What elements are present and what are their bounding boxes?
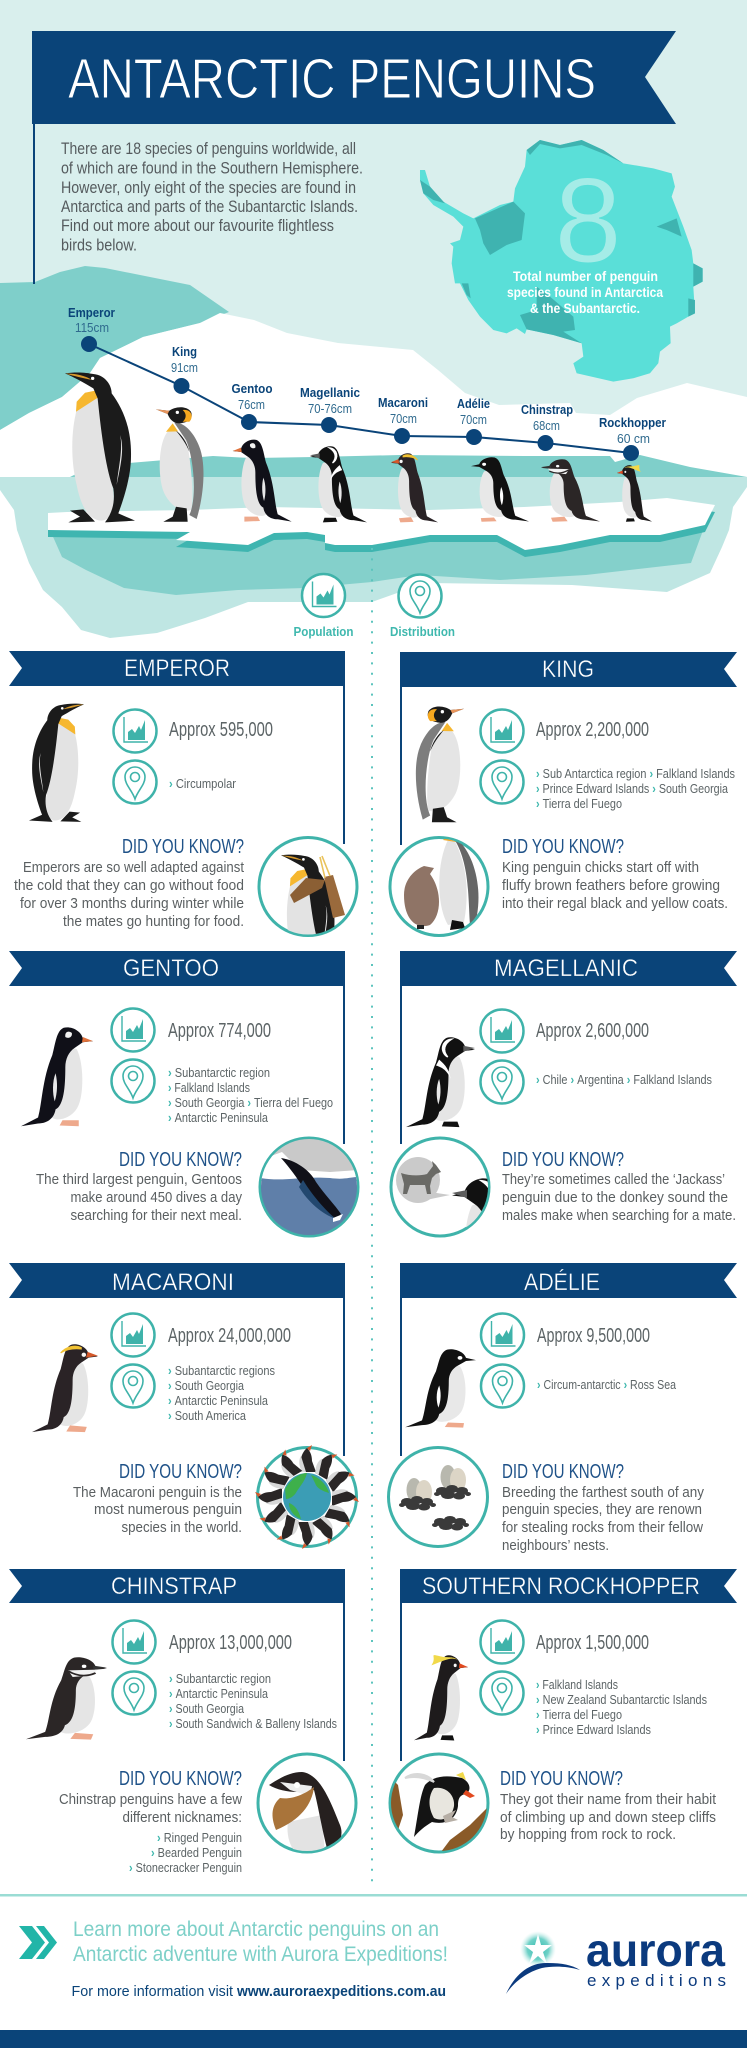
rockhopper banner: SOUTHERN ROCKHOPPER [422,1573,700,1600]
title banner: ANTARCTIC PENGUINS [68,47,596,111]
height labels: 68cm [533,418,560,433]
did you know text: penguin species, they are renown [502,1501,702,1518]
population icon [114,710,156,752]
king banner [400,652,737,845]
height labels: 60 cm [617,431,650,446]
aurora expeditions logo: aurora [586,1924,725,1976]
chinstrap banner: CHINSTRAP [111,1573,237,1600]
sky background [0,0,747,440]
illustration: globe with penguins [255,1445,359,1549]
dark strip under floe [48,505,715,557]
population icon [480,1010,524,1052]
horizon teal band [68,455,747,478]
did you know text: penguin due to the donkey sound the [502,1189,728,1206]
distribution icon [480,760,524,804]
population value: Approx 24,000,000 [168,1325,291,1347]
population value: Approx 595,000 [169,719,273,741]
did you know text: DID YOU KNOW? [122,836,244,858]
distribution list [168,1065,333,1125]
distribution list: › Tierra del Fuego [536,796,622,811]
macaroni banner: MACARONI [112,1269,234,1296]
did you know text: make around 450 dives a day [70,1189,242,1206]
illustration: rockhopper jumping [388,1754,490,1856]
panel: adelie [388,1263,737,1554]
emperor penguin [29,704,84,822]
section divider dotted line [371,548,373,1888]
intro text: Find out more about our favourite flightless [61,217,334,235]
height labels: Macaroni [378,396,428,410]
did you know text: different nicknames: [122,1809,242,1826]
macaroni penguin [32,1344,98,1432]
did you know text: the cold that they can go without food [14,877,244,894]
footer bar [0,2030,747,2048]
did you know text: DID YOU KNOW? [502,836,624,858]
intro text: birds below. [61,236,137,254]
intro text: However, only eight of the species are found in [61,179,356,197]
legend: distribution [390,574,455,639]
distribution list: › New Zealand Subantarctic Islands [536,1692,707,1707]
height chart line [81,336,639,461]
height labels: Chinstrap [521,403,573,417]
intro text: of which are found in the Southern Hemisphere. [61,160,363,178]
did you know text [500,1768,717,1843]
map caption: & the Subantarctic. [530,301,640,316]
magellanic penguin [406,1037,475,1127]
distribution icon [114,760,156,804]
gentoo banner: GENTOO [123,955,219,982]
did you know text: the mates go hunting for food. [63,913,244,930]
population icon [481,1314,524,1356]
height labels: Rockhopper [599,416,666,430]
did you know text: DID YOU KNOW? [502,1149,624,1171]
map caption: species found in Antarctica [507,285,663,300]
population value: Approx 9,500,000 [537,1325,650,1347]
did you know text: › Bearded Penguin [151,1845,242,1860]
white iceberg [0,313,747,495]
footer call to action: Antarctic adventure with Aurora Expeditions! [73,1943,448,1966]
height labels: Magellanic [300,386,360,400]
gentoo penguin [21,1027,93,1126]
rockhopper banner [400,1569,737,1761]
map caption [507,269,663,316]
did you know text: Chinstrap penguins have a few [59,1791,242,1808]
king penguin [416,707,464,822]
did you know text: King penguin chicks start off with [502,859,699,876]
title banner [32,31,676,284]
did you know text: fluffy brown feathers before growing [502,877,720,894]
aurora expeditions logo [506,1924,726,1994]
distribution list: › Antarctic Peninsula [168,1110,269,1125]
illustration: emperor with quiver [258,836,358,937]
did you know text: › Ringed Penguin [157,1830,242,1845]
panel: southern rockhopper [388,1569,737,1856]
did you know text: DID YOU KNOW? [502,1461,624,1483]
distribution list: › Subantarctic region [168,1065,270,1080]
did you know text: neighbours’ nests. [502,1537,609,1554]
ice floe [48,498,715,550]
did you know text [73,1461,242,1536]
did you know text: of climbing up and down steep cliffs [500,1809,716,1826]
distribution icon [481,1364,524,1408]
distribution icon [112,1364,154,1408]
did you know text: The Macaroni penguin is the [73,1484,242,1501]
height labels: Adélie [457,397,490,411]
did you know text: Breeding the farthest south of any [502,1484,704,1501]
did you know text: DID YOU KNOW? [119,1768,242,1790]
magellanic banner [400,951,737,1144]
aurora expeditions logo: expeditions [587,1971,726,1990]
did you know text: The third largest penguin, Gentoos [36,1171,242,1188]
panel: king [390,652,737,936]
did you know text: searching for their next meal. [70,1207,242,1224]
intro text: There are 18 species of penguins worldwide, all [61,140,356,158]
illustration: king and chick [390,834,488,936]
intro text [61,140,363,254]
legend: distribution: Distribution [390,624,455,639]
height labels: 70-76cm [308,401,352,416]
distribution icon [112,1672,156,1714]
king banner: KING [542,656,594,683]
footer website [72,1983,446,2000]
did you know text: DID YOU KNOW? [500,1768,623,1790]
distribution list: › Circumpolar [169,776,237,791]
population value: Approx 774,000 [168,1020,271,1042]
legend: population: Population [294,624,354,639]
did you know text: for over 3 months during winter while [20,895,244,912]
distribution list: › Prince Edward Islands [536,1722,651,1737]
did you know text: DID YOU KNOW? [119,1149,242,1171]
panel: macaroni [9,1263,359,1549]
illustration: eggs and nests [388,1448,488,1546]
did you know text: by hopping from rock to rock. [500,1826,676,1843]
population icon [112,1620,156,1664]
icon: chevrons [19,1926,57,1959]
did you know text: Emperors are so well adapted against [23,859,245,876]
adelie banner: ADÉLIE [524,1269,600,1296]
did you know text: › Stonecracker Penguin [129,1860,242,1875]
illustration: chinstrap head [258,1754,356,1856]
submerged iceberg [50,525,705,595]
magellanic banner: MAGELLANIC [494,955,638,982]
distribution list: › South Georgia [168,1378,245,1393]
distribution list: › Chile › Argentina › Falkland Islands [536,1072,712,1087]
did you know text: species in the world. [122,1519,242,1536]
distribution list: › Prince Edward Islands › South Georgia [536,781,729,796]
did you know text [502,1461,704,1554]
population icon [480,710,524,752]
did you know text [502,836,728,912]
penguin line-up [65,372,652,522]
did you know text: DID YOU KNOW? [119,1461,242,1483]
footer divider [0,1894,747,1896]
did you know text [502,1149,736,1224]
did you know text [36,1149,242,1224]
adelie banner [400,1263,737,1456]
panel: chinstrap [9,1569,356,1875]
height labels: 76cm [238,397,265,412]
population value: Approx 1,500,000 [536,1632,649,1654]
distribution list: › Circum-antarctic › Ross Sea [537,1377,677,1392]
legend: population [294,574,354,639]
distribution list [536,766,735,811]
map caption: Total number of penguin [513,269,658,284]
macaroni banner [9,1263,345,1456]
rockhopper penguin [414,1655,468,1741]
height labels: 115cm [75,320,109,335]
intro text: Antarctica and parts of the Subantarctic Islands. [61,198,358,216]
distribution list [169,1671,337,1731]
did you know text: They got their name from their habit [500,1791,717,1808]
did you know text [59,1768,242,1875]
height labels [68,306,666,446]
population icon [112,1008,154,1052]
distribution list: › Subantarctic regions [168,1363,275,1378]
distribution list: › South Sandwich & Balleny Islands [169,1716,337,1731]
footer website: For more information visit [72,1983,234,2000]
illustration: gentoo diving [260,1137,358,1240]
height labels: 91cm [171,360,198,375]
distribution list: › Antarctic Peninsula [169,1686,269,1701]
gentoo banner [9,951,345,1144]
teal mountain [0,266,229,430]
height labels: Gentoo [232,382,273,396]
distribution list: › Antarctic Peninsula [168,1393,269,1408]
panel: gentoo [9,951,358,1240]
distribution list [168,1363,275,1423]
population icon [480,1620,524,1664]
illustration: donkey and penguin [390,1136,490,1238]
emperor banner [9,651,345,844]
did you know text: most numerous penguin [94,1501,242,1518]
population value: Approx 2,200,000 [536,719,649,741]
distribution list: › South America [168,1408,247,1423]
adelie penguin [405,1349,476,1428]
distribution icon [480,1060,524,1104]
population icon [112,1314,154,1356]
distribution list: › Falkland Islands [168,1080,250,1095]
water and submerged ice [0,477,747,638]
distribution icon [480,1672,524,1714]
did you know text: for stealing rocks from their fellow [502,1519,703,1536]
footer call to action [73,1918,448,1966]
panel: emperor [9,651,358,937]
population value: Approx 13,000,000 [169,1632,292,1654]
height labels: King [172,345,197,359]
distribution list: › South Georgia [169,1701,245,1716]
distribution list: › Falkland Islands [536,1677,618,1692]
distribution icon [112,1060,154,1102]
chinstrap penguin [26,1657,107,1740]
emperor banner: EMPEROR [124,655,230,682]
antarctica map [420,140,703,382]
chinstrap banner [9,1569,345,1761]
did you know text [14,836,245,930]
height labels: 70cm [390,411,417,426]
distribution list: › Subantarctic region [169,1671,271,1686]
distribution list: › Sub Antarctica region › Falkland Islands [536,766,735,781]
footer website: www.auroraexpeditions.com.au [236,1983,446,2000]
distribution list [536,1677,707,1737]
footer call to action: Learn more about Antarctic penguins on an [73,1918,439,1941]
height labels: 70cm [460,412,487,427]
population value: Approx 2,600,000 [536,1020,649,1042]
panel: magellanic [390,951,737,1238]
distribution list: › Tierra del Fuego [536,1707,622,1722]
distribution list: › South Georgia › Tierra del Fuego [168,1095,333,1110]
height labels: Emperor [68,306,115,320]
number 8: 8 [554,152,622,288]
